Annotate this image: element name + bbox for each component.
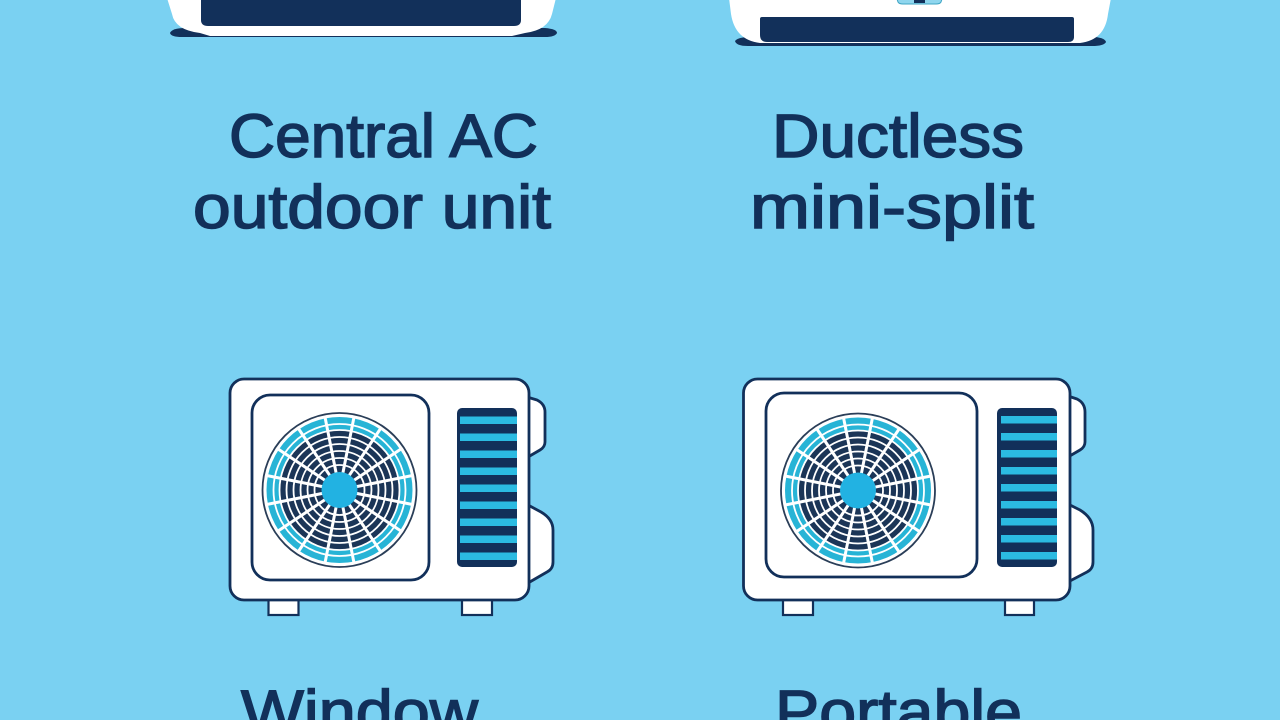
heading: Central AC outdoor unit: outdoor unit — [193, 173, 551, 241]
icon: fan grille — [262, 413, 416, 567]
casing — [744, 379, 1070, 600]
inner panel — [252, 395, 429, 580]
heading: Ductless mini-split: Ductless — [772, 102, 1024, 170]
icon: striped vent — [997, 408, 1057, 567]
icon: side valve covers — [527, 397, 553, 583]
heading: Ductless mini-split: mini-split — [750, 173, 1034, 241]
heading: Ductless mini-split — [750, 102, 1034, 241]
icon: mounting feet — [783, 598, 1034, 615]
panel: ductless mini-split indoor unit illustration (cropped) — [729, 0, 1111, 46]
icon: fan grille — [781, 414, 935, 568]
panel: outdoor condenser unit, left — [230, 379, 553, 615]
icon: mounting feet — [268, 598, 492, 615]
casing — [230, 379, 529, 600]
heading: Central AC outdoor unit: Central AC — [229, 102, 538, 170]
icon: striped vent — [457, 408, 517, 567]
panel: central AC indoor unit illustration (cropped) — [167, 0, 557, 37]
heading: Central AC outdoor unit — [193, 102, 551, 241]
panel: outdoor condenser unit, right — [744, 379, 1093, 615]
icon: side valve covers — [1068, 396, 1093, 582]
inner panel — [766, 393, 977, 577]
